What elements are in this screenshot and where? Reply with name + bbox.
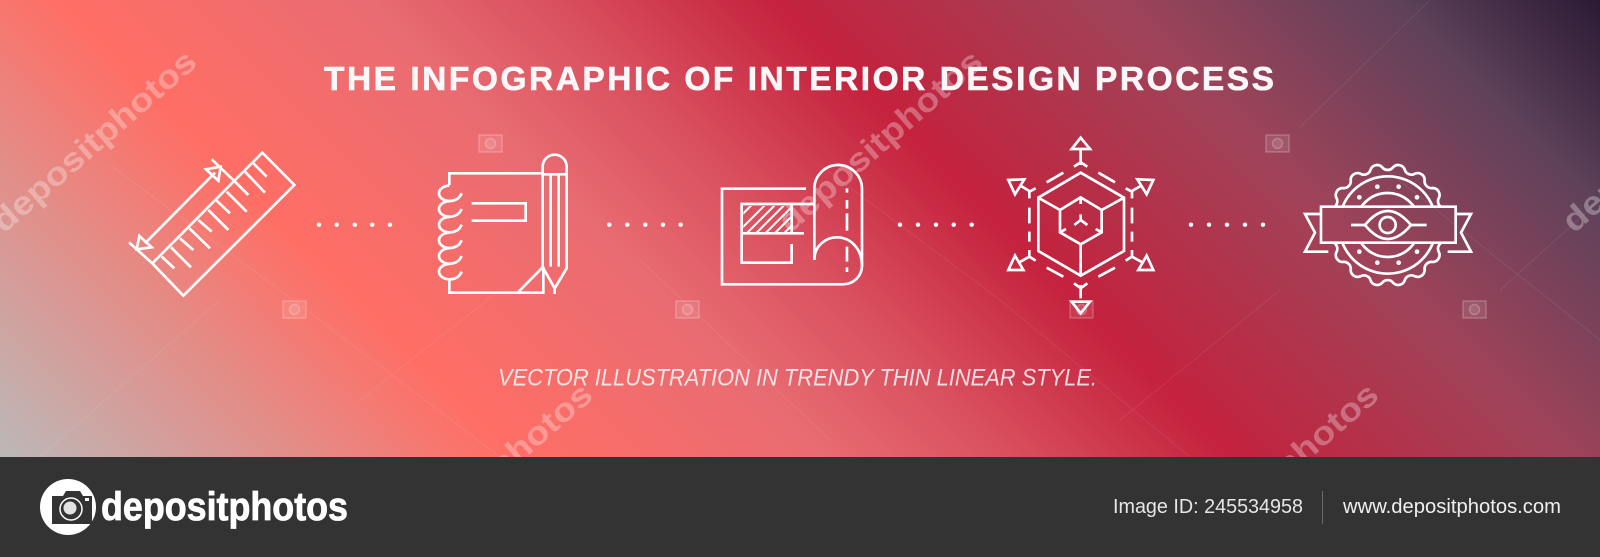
icon: 3D cube with arrows (1008, 138, 1153, 313)
footer divider (1322, 491, 1323, 524)
dotted connector 1 (317, 222, 392, 227)
watermark camera icons (283, 135, 1486, 318)
watermark text 2: depositphotos (770, 42, 989, 239)
icon: blueprint roll (722, 165, 862, 284)
website url: www.depositphotos.com (1342, 496, 1561, 518)
dotted connector 2 (607, 222, 683, 227)
logo icon: camera (40, 479, 96, 535)
icon: notebook and pencil (439, 155, 567, 294)
subtitle: VECTOR ILLUSTRATION IN TRENDY THIN LINEAR STYLE. (498, 364, 1097, 392)
icon: ruler (129, 153, 294, 296)
image id: Image ID: 245534958 (1113, 496, 1303, 518)
title: THE INFOGRAPHIC OF INTERIOR DESIGN PROCESS (324, 61, 1274, 98)
logo wordmark: depositphotos (101, 485, 348, 529)
footer bar (0, 457, 1600, 557)
icon: badge with eye (1305, 165, 1471, 285)
dotted connector 4 (1189, 222, 1265, 227)
dotted connector 3 (898, 222, 974, 227)
